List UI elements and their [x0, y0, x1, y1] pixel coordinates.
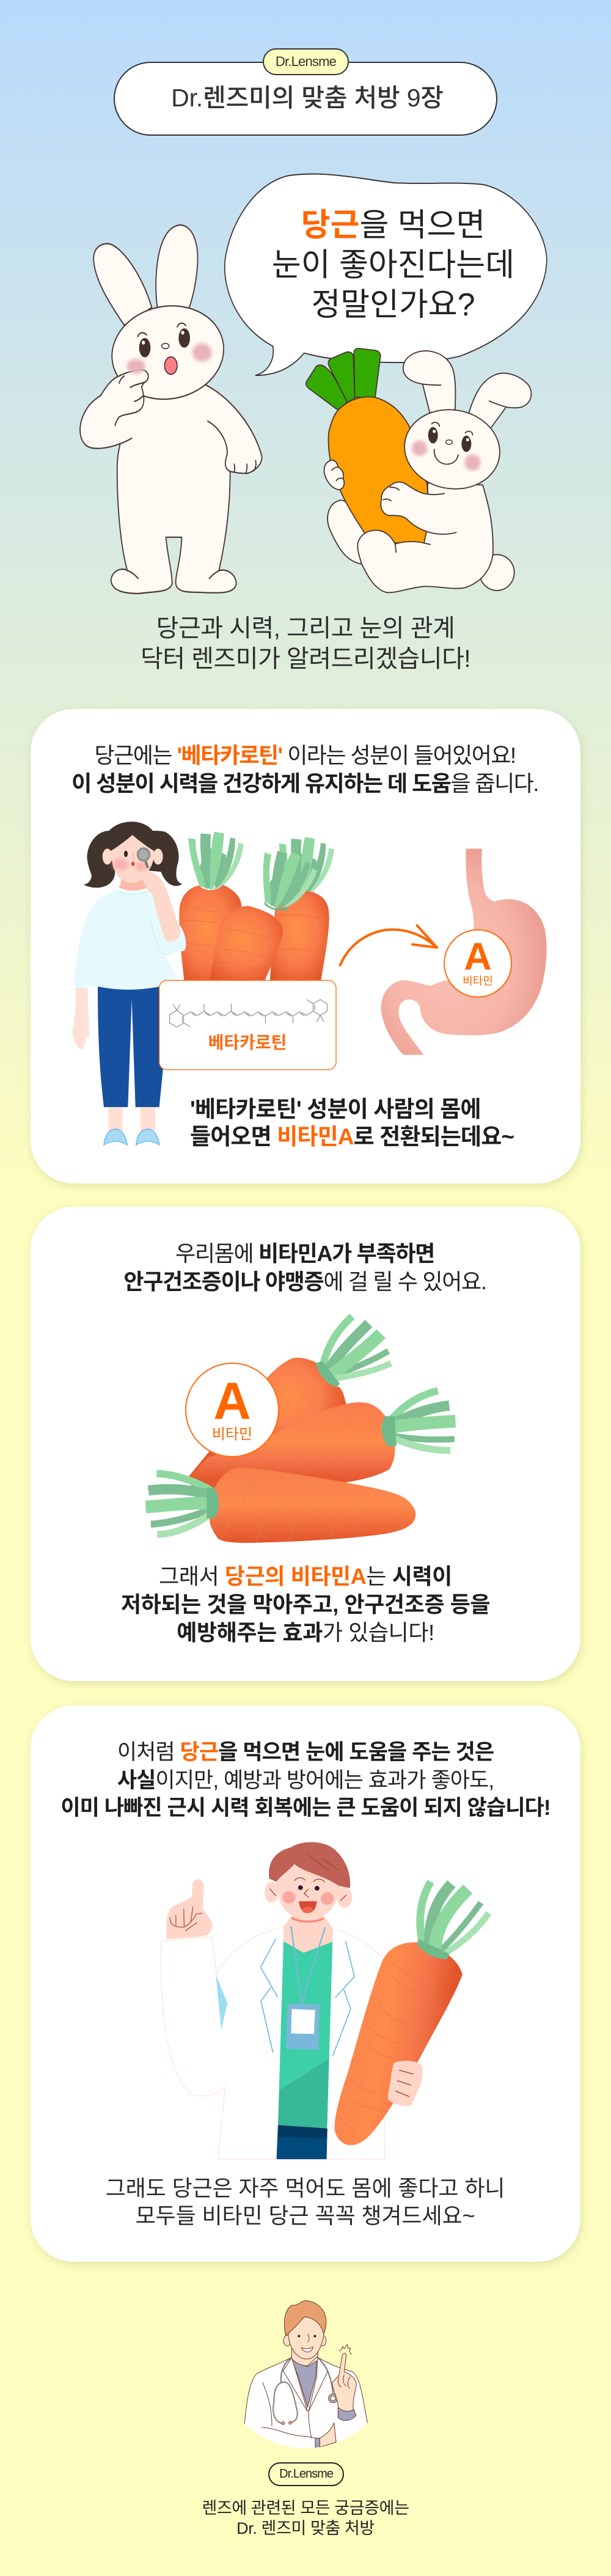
rabbit right, hugging carrot [306, 348, 532, 593]
coat and scrubs [161, 1916, 385, 2159]
stomach illustration [381, 848, 547, 1055]
head [265, 1842, 352, 1920]
vitamin A badge in stomach: A [464, 935, 492, 978]
card 2 conclusion text: 예방해주는 효과가 있습니다! [177, 1620, 434, 1645]
carrots [179, 832, 334, 981]
vitamin A badge on carrots [185, 1363, 279, 1457]
woman figure [72, 822, 186, 1145]
footer doctor illustration [244, 2300, 368, 2448]
card 2 heading text: 우리몸에 비타민A가 부족하면 [175, 1241, 434, 1266]
arrow: carrot to stomach [338, 924, 439, 967]
card 2 conclusion text [121, 1564, 490, 1645]
illustration: three carrots [145, 1314, 456, 1543]
card 1 heading text: 이 성분이 시력을 건강하게 유지하는 데 도움을 줍니다. [71, 771, 538, 796]
carrot body [329, 397, 428, 543]
card 3 conclusion text [106, 2176, 505, 2228]
large carrot [335, 1882, 489, 2145]
panel: vitamin A deficiency card [31, 1207, 580, 1681]
speech bubble [224, 174, 547, 377]
card 1 conclusion text: '베타카로틴' 성분이 사람의 몸에 [190, 1097, 481, 1122]
raised hand [166, 1879, 213, 1939]
card 2 heading text: 안구건조증이나 야맹증에 걸 릴 수 있어요. [123, 1269, 486, 1294]
vitamin A badge in stomach: 비타민 [463, 975, 493, 987]
front carrot [145, 1369, 415, 1543]
card 3 heading text: 사실이지만, 예방과 방어에는 효과가 좋아도, [117, 1768, 494, 1792]
label: beta carotene: 베타카로틴 [208, 1033, 287, 1052]
badge: Dr.Lensme footer: Dr.Lensme [279, 2467, 333, 2481]
title text: Dr.렌즈미의 맞춤 처방 9장 [171, 84, 444, 112]
carrot leaves [306, 348, 381, 410]
vitamin A badge on carrots: A [213, 1372, 251, 1430]
panel: beta carotene card [31, 709, 580, 1183]
footer text [202, 2499, 409, 2537]
card 3 conclusion text: 그래도 당근은 자주 먹어도 몸에 좋다고 하니 [106, 2176, 505, 2201]
illustration: doctor holding carrot [160, 1842, 491, 2160]
bubble question text: 당근을 먹으면 [301, 208, 485, 243]
bubble question text: 정말인가요? [311, 287, 475, 323]
card 2 conclusion text: 저하되는 것을 막아주고, 안구건조증 등을 [121, 1592, 490, 1617]
footer text: 렌즈에 관련된 모든 궁금증에는 [202, 2499, 409, 2517]
intro text: 닥터 렌즈미가 알려드리겠습니다! [141, 646, 470, 672]
card 2 conclusion text: 그래서 당근의 비타민A는 시력이 [159, 1564, 452, 1589]
vitamin A badge in stomach [444, 929, 512, 998]
badge: Dr.Lensme footer [268, 2462, 344, 2486]
carrot hand [388, 2061, 423, 2106]
card 3 conclusion text: 모두들 비타민 당근 꼭꼭 챙겨드세요~ [136, 2203, 475, 2228]
card 1 heading text [71, 743, 538, 796]
card 3 heading text [60, 1740, 551, 1820]
illustration: woman with carrots and molecule box [72, 822, 337, 1146]
bubble question text: 눈이 좋아진다는데 [272, 248, 514, 283]
header title pill [114, 62, 497, 136]
card 1 conclusion text: 들어오면 비타민A로 전환되는데요~ [190, 1124, 514, 1149]
card 1 heading text: 당근에는 '베타카로틴' 이라는 성분이 들어있어요! [94, 743, 516, 768]
card 3 heading text: 이미 나빠진 근시 시력 회복에는 큰 도움이 되지 않습니다! [60, 1796, 551, 1820]
bubble question text [272, 208, 514, 323]
middle carrot [188, 1391, 455, 1482]
molecule box [159, 981, 336, 1070]
rabbit left, thinking [79, 224, 263, 594]
back carrot [188, 1316, 391, 1512]
card 3 heading text: 이처럼 당근을 먹으면 눈에 도움을 주는 것은 [117, 1740, 494, 1764]
badge: Dr.Lensme top [263, 48, 349, 75]
intro text: 당근과 시력, 그리고 눈의 관계 [156, 615, 455, 642]
footer text: Dr. 렌즈미 맞춤 처방 [236, 2519, 375, 2537]
vitamin A badge on carrots: 비타민 [212, 1426, 252, 1443]
title pill outline [114, 62, 497, 136]
badge: Dr.Lensme top: Dr.Lensme [276, 54, 336, 69]
card 1 conclusion text [190, 1097, 514, 1149]
intro text [141, 615, 470, 672]
card 2 heading text [123, 1241, 486, 1294]
panel: effect summary card [31, 1706, 580, 2262]
